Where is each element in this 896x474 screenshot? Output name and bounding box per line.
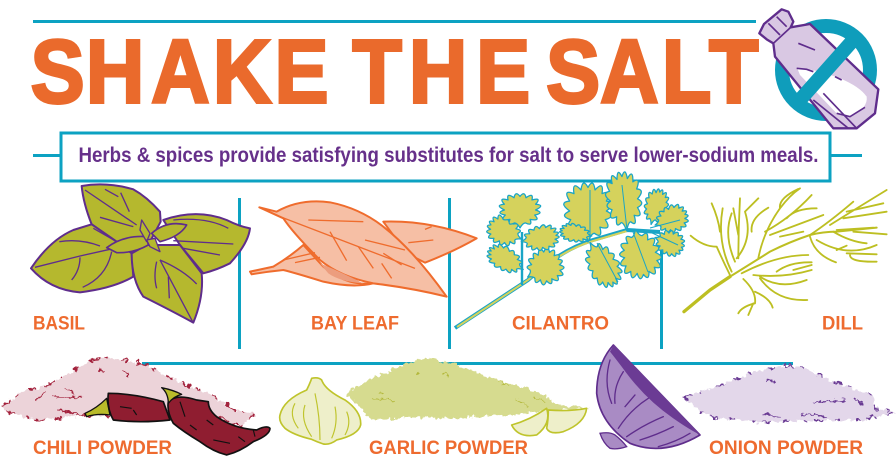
icon: garlic pile, bulb and cloves xyxy=(280,358,589,444)
panel: basil xyxy=(31,184,250,334)
panel: chili powder xyxy=(2,357,270,459)
label: cilantro: CILANTRO xyxy=(512,314,609,334)
icon: basil leaves xyxy=(31,184,250,323)
icon: crossed-out salt shaker xyxy=(759,9,878,128)
icon: chili pile and peppers xyxy=(2,357,270,455)
panel: bay leaf xyxy=(250,201,477,334)
label: garlic powder: GARLIC POWDER xyxy=(369,438,528,459)
panel: garlic powder xyxy=(280,358,589,459)
label: dill: DILL xyxy=(822,314,863,334)
icon: bay leaves xyxy=(250,201,477,297)
subtitle text: Herbs & spices provide satisfying substitutes for salt to serve lower-sodium meals. xyxy=(78,144,818,167)
panel: cilantro xyxy=(455,171,692,334)
icon: dill sprig xyxy=(684,188,887,315)
panel: dill xyxy=(684,188,887,334)
title: SHAKE THE SALT xyxy=(31,22,758,122)
label: bay leaf: BAY LEAF xyxy=(311,314,399,334)
label: onion powder: ONION POWDER xyxy=(709,438,863,459)
panel: onion powder xyxy=(597,345,896,459)
icon: onion pile and onion half xyxy=(597,345,896,449)
label: chili powder: CHILI POWDER xyxy=(33,438,172,459)
label: basil: BASIL xyxy=(33,314,85,334)
icon: cilantro sprig xyxy=(455,171,692,328)
panel: subtitle box xyxy=(61,133,830,181)
